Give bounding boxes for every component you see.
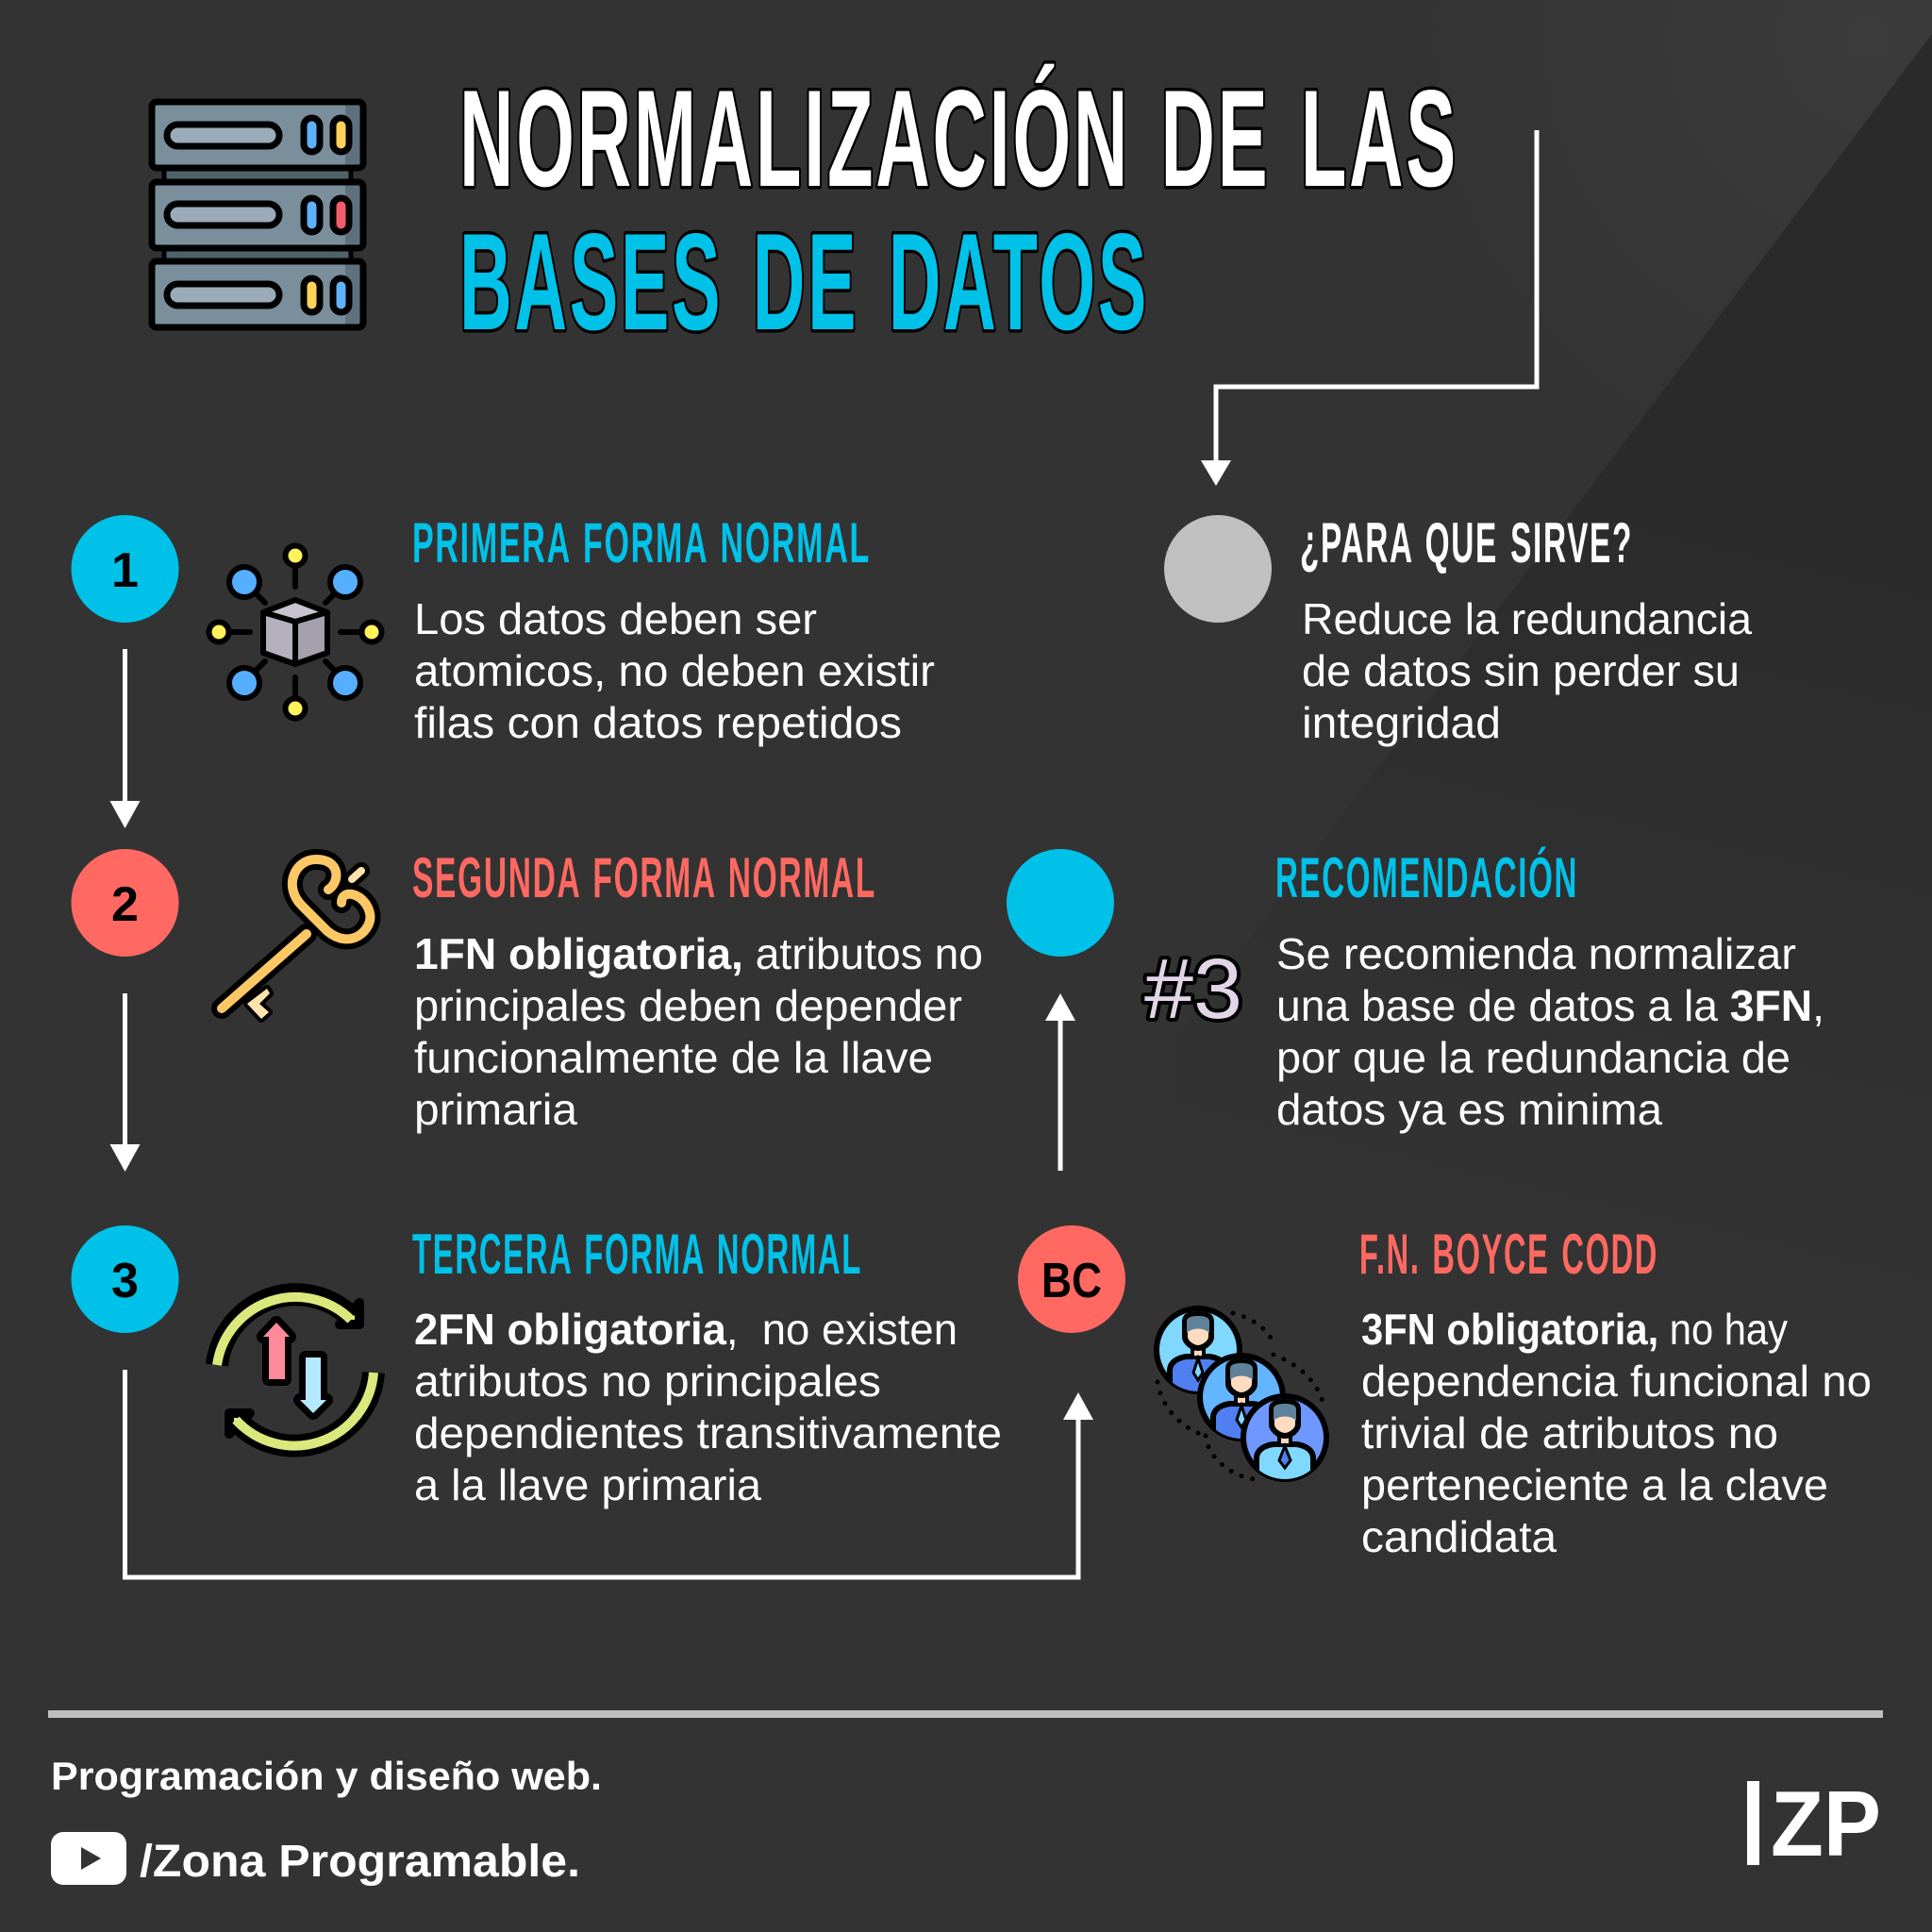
body text: dependencia funcional no xyxy=(1361,1357,1872,1406)
logo ZP: ZP xyxy=(1771,1772,1881,1875)
step badge 1 xyxy=(72,515,179,623)
title xyxy=(459,61,1458,358)
heading: SEGUNDA FORMA NORMAL xyxy=(412,846,876,909)
icon: three people xyxy=(1157,1308,1326,1483)
body text: primaria xyxy=(414,1085,577,1134)
icon: key xyxy=(222,859,370,1019)
body text: 3FN obligatoria, no hay xyxy=(1361,1305,1788,1354)
blue badge xyxy=(1007,849,1114,957)
heading: F.N. BOYCE CODD xyxy=(1359,1223,1658,1286)
gray badge xyxy=(1164,515,1272,623)
body text: trivial de atributos no xyxy=(1361,1408,1778,1457)
icon: atom cube network xyxy=(209,545,381,719)
body text: a la llave primaria xyxy=(414,1460,761,1509)
panel: boyce codd xyxy=(1018,1223,1872,1561)
body text: dependientes transitivamente xyxy=(414,1408,1002,1457)
heading: ¿PARA QUE SIRVE? xyxy=(1300,511,1633,575)
tagline: Programación y diseño web. xyxy=(51,1754,602,1798)
arrow: BC to recomendacion xyxy=(1045,993,1075,1171)
body text: funcionalmente de la llave xyxy=(414,1033,933,1082)
body text: 1FN obligatoria, atributos no xyxy=(414,929,983,978)
step badge BC xyxy=(1018,1225,1125,1333)
arrow: title to purpose xyxy=(1201,130,1537,486)
panel: tercera forma normal xyxy=(72,1223,1002,1509)
icon: number three tag: #3 xyxy=(1144,942,1242,1037)
step badge 2: 2 xyxy=(111,877,139,932)
channel name: /Zona Programable. xyxy=(140,1837,580,1887)
body text: candidata xyxy=(1361,1512,1557,1561)
body text: atributos no principales xyxy=(414,1357,881,1406)
arrow: step 3 to BC xyxy=(125,1370,1093,1577)
icon: circular arrows xyxy=(217,1294,374,1446)
panel: para que sirve xyxy=(1164,511,1752,747)
body text xyxy=(1276,929,1824,1134)
step badge 2 xyxy=(72,849,179,957)
icon: youtube xyxy=(51,1832,126,1885)
body text xyxy=(414,929,983,1134)
body text xyxy=(1302,594,1752,747)
body text xyxy=(1361,1305,1872,1561)
body text: por que la redundancia de xyxy=(1276,1033,1790,1082)
icon: server rack xyxy=(152,102,363,327)
step badge BC: BC xyxy=(1041,1254,1102,1308)
body text: de datos sin perder su xyxy=(1302,646,1740,695)
arrow: step 1 to 2 xyxy=(109,649,140,828)
footer xyxy=(51,1754,1881,1887)
body text: una base de datos a la 3FN, xyxy=(1276,981,1824,1030)
body text: Se recomienda normalizar xyxy=(1276,929,1796,978)
step badge 1: 1 xyxy=(111,543,139,598)
body text: principales deben depender xyxy=(414,981,962,1030)
heading: PRIMERA FORMA NORMAL xyxy=(412,511,871,575)
body text xyxy=(414,594,935,747)
step badge 3: 3 xyxy=(111,1254,139,1308)
panel: primera forma normal xyxy=(72,511,935,747)
body text: Reduce la redundancia xyxy=(1302,594,1752,643)
heading: RECOMENDACIÓN xyxy=(1275,846,1578,909)
body text: 2FN obligatoria, no existen xyxy=(414,1305,958,1354)
arrow: step 2 to 3 xyxy=(109,993,140,1172)
body text xyxy=(414,1305,1002,1509)
heading: TERCERA FORMA NORMAL xyxy=(412,1223,862,1286)
panel: segunda forma normal xyxy=(72,846,983,1134)
body text: perteneciente a la clave xyxy=(1361,1460,1828,1509)
body text: datos ya es minima xyxy=(1276,1085,1662,1134)
body text: integridad xyxy=(1302,698,1501,747)
panel: recomendacion xyxy=(1007,846,1824,1134)
body text: filas con datos repetidos xyxy=(414,698,902,747)
body text: atomicos, no deben existir xyxy=(414,646,935,695)
step badge 3 xyxy=(72,1225,179,1333)
body text: Los datos deben ser xyxy=(414,594,817,643)
title line 2: BASES DE DATOS xyxy=(459,205,1149,358)
